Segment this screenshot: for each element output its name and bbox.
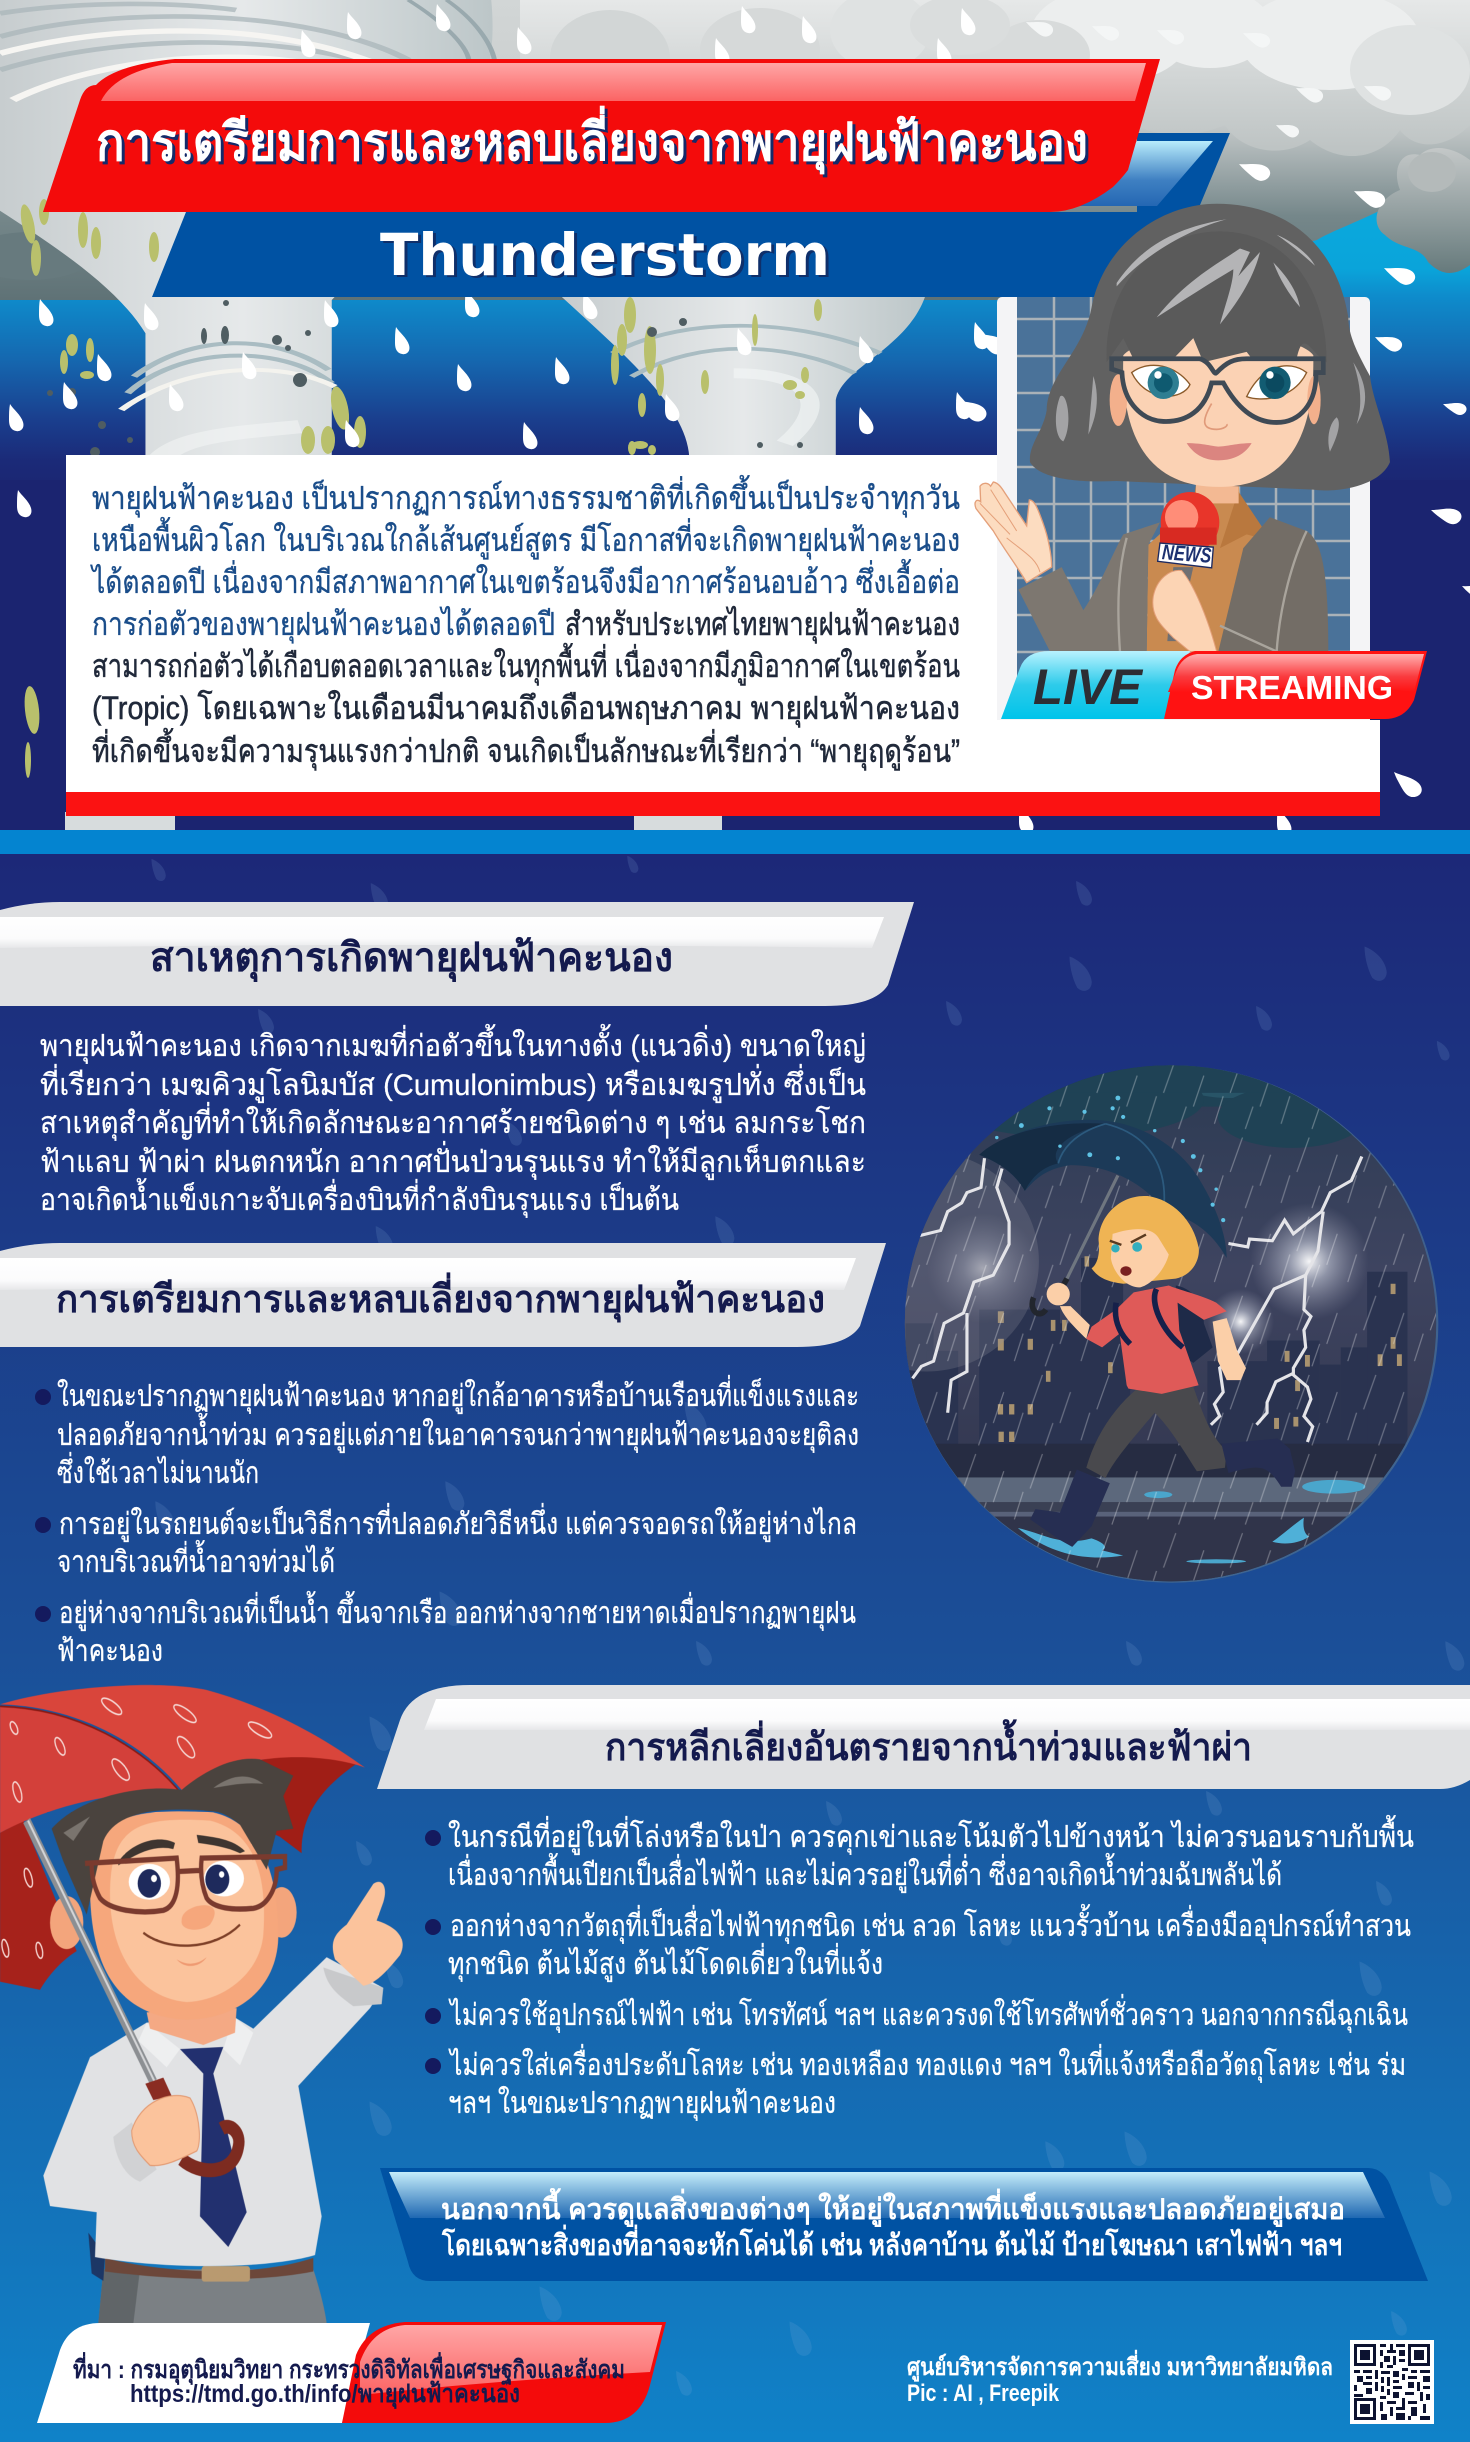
credit: source box: https://tmd.go.th/info/พายุฝนฟ้าคะนอง xyxy=(130,2380,520,2410)
background: faint rain drops xyxy=(150,854,1466,2397)
reporter face xyxy=(1123,335,1313,487)
man trousers xyxy=(98,2269,327,2323)
illustration: storm clouds xyxy=(0,0,1470,300)
background: sky xyxy=(0,200,1470,500)
runner legs and boots xyxy=(1086,1387,1227,1478)
man holding hand xyxy=(132,2096,199,2166)
credit: organisation xyxy=(907,2349,1333,2407)
credit: source box: ที่มา : กรมอุตุนิยมวิทยา กระทรวงดิจิทัลเพื่อเศรษฐกิจและสังคม xyxy=(73,2352,625,2386)
runner torso and arms xyxy=(1086,1285,1227,1394)
list: preparation bullets: ซึ่งใช้เวลาไม่นานนัก xyxy=(57,1452,259,1490)
reporter jacket xyxy=(1018,522,1160,651)
background: navy lower header xyxy=(0,480,1470,840)
icon: QR code xyxy=(1350,2340,1434,2424)
umbrella canopy xyxy=(0,1685,365,1790)
man neck xyxy=(147,2008,237,2045)
text block: intro paragraph: การก่อตัวของพายุฝนฟ้าคะนองได้ตลอดปี xyxy=(92,606,555,644)
text block: intro paragraph: สามารถก่อตัวได้เกือบตลอดเวลาและในทุกพื้นที่ เนื่องจากมีภูมิอากาศในเขตร้อน xyxy=(92,643,960,686)
list: preparation bullets: ในขณะปรากฏพายุฝนฟ้าคะนอง หากอยู่ใกล้อาคารหรือบ้านเรือนที่แข็งแรงและ xyxy=(57,1375,859,1415)
city buildings xyxy=(906,1258,1407,1482)
reporter hair xyxy=(1030,204,1390,490)
divider band xyxy=(0,830,1470,854)
subtitle: Thunderstorm: Thunderstorm xyxy=(383,223,833,291)
list: preparation bullets: อยู่ห่างจากบริเวณที่เป็นน้ำ ขึ้นจากเรือ ออกห่างจากชายหาดเมื่อปรากฏพายุฝน xyxy=(59,1591,856,1632)
reporter eyes xyxy=(1132,365,1307,399)
illustration: news reporter: NEWS xyxy=(1161,541,1212,568)
lightning bolts xyxy=(913,1156,1362,1442)
list: flood and lightning bullets: ทุกชนิด ต้นไม้สูง ต้นไม้โดดเดี่ยวในที่แจ้ง xyxy=(448,1943,883,1983)
credit: organisation: ศูนย์บริหารจัดการความเสี่ยง มหาวิทยาลัยมหิดล xyxy=(907,2349,1333,2382)
credit: source box xyxy=(37,2322,666,2423)
text block: intro paragraph: เหนือพื้นผิวโลก ในบริเวณใกล้เส้นศูนย์สูตร มีโอกาสที่จะเกิดพายุฝนฟ้าคะนอง xyxy=(92,517,960,560)
runner head xyxy=(1092,1196,1199,1284)
reporter neck and blouse xyxy=(1147,479,1270,651)
umbrella xyxy=(979,1120,1227,1258)
badge: live streaming xyxy=(1001,651,1427,719)
reporter nose and lips xyxy=(1205,404,1227,429)
night clouds xyxy=(994,1065,1352,1148)
illustration: white rain drops xyxy=(9,4,1470,835)
section heading: causes: สาเหตุการเกิดพายุฝนฟ้าคะนอง xyxy=(150,936,673,983)
illustration: flying leaves and debris xyxy=(18,199,822,778)
runner backpack xyxy=(1176,1285,1213,1363)
illustration: man with red umbrella xyxy=(0,1685,403,2323)
illustration: woman running in storm xyxy=(904,1065,1438,1583)
title text: การเตรียมการและหลบเลี่ยงจากพายุฝนฟ้าคะนอง xyxy=(96,106,1088,175)
text block: causes paragraph: สาเหตุสำคัญที่ทำให้เกิดลักษณะอากาศร้ายชนิดต่าง ๆ เช่น ลมกระโชก xyxy=(40,1102,866,1142)
text block: intro paragraph: ได้ตลอดปี เนื่องจากมีสภาพอากาศในเขตร้อนจึงมีอากาศร้อนอบอ้าว ซึ่งเอื้อต่อ xyxy=(90,559,960,600)
man eyes xyxy=(129,1864,170,1900)
list: preparation bullets: ฟ้าคะนอง xyxy=(57,1635,163,1668)
umbrella droplets xyxy=(1,1695,273,1959)
man ears and face xyxy=(50,1896,83,1949)
background: lower section xyxy=(0,854,1470,2442)
text block: causes paragraph: อาจเกิดน้ำแข็งเกาะจับเครื่องบินที่กำลังบินรุนแรง เป็นต้น xyxy=(40,1178,679,1219)
text block: intro paragraph: พายุฝนฟ้าคะนอง เป็นปรากฏการณ์ทางธรรมชาติที่เกิดขึ้นเป็นประจำทุกวัน xyxy=(92,475,960,518)
section heading: flood and lightning: การหลีกเลี่ยงอันตรายจากน้ำท่วมและฟ้าผ่า xyxy=(605,1719,1252,1769)
credit: organisation: Pic : AI , Freepik xyxy=(907,2380,1060,2407)
street xyxy=(936,1444,1406,1478)
list: flood and lightning bullets xyxy=(425,1815,1414,2122)
illustration: tornado bases below panel xyxy=(65,812,722,832)
label: STREAMING: STREAMING xyxy=(1191,669,1393,706)
text block: intro paragraph: (Tropic) โดยเฉพาะในเดือนมีนาคมถึงเดือนพฤษภาคม พายุฝนฟ้าคะนอง xyxy=(92,690,960,728)
panel: studio backdrop xyxy=(997,297,1370,737)
reporter microphone xyxy=(1161,492,1219,553)
man brows xyxy=(118,1835,245,1865)
lightning glows xyxy=(937,1224,1028,1314)
reporter raised hand xyxy=(975,482,1052,583)
callout: care for belongings: นอกจากนี้ ควรดูแลสิ่งของต่างๆ ให้อยู่ในสภาพที่แข็งแรงและปลอดภัยอยู่เสมอ xyxy=(441,2187,1345,2227)
list: preparation bullets xyxy=(35,1375,859,1668)
red base bar xyxy=(66,792,1380,816)
list: preparation bullets: การอยู่ในรถยนต์จะเป็นวิธีการที่ปลอดภัยวิธีหนึ่ง แต่ควรจอดรถให้อยู่ห่างไกล xyxy=(59,1503,857,1542)
list: preparation bullets: ปลอดภัยจากน้ำท่วม ควรอยู่แต่ภายในอาคารจนกว่าพายุฝนฟ้าคะนองจะยุติลง xyxy=(57,1413,859,1454)
man glasses xyxy=(85,1856,285,1912)
banner: blue subtitle xyxy=(152,133,1230,297)
section heading: preparation xyxy=(0,1243,886,1347)
illustration: right tornado xyxy=(561,297,925,470)
text block: causes paragraph: ที่เรียกว่า เมฆคิวมูโลนิมบัส (Cumulonimbus) หรือเมฆรูปทั่ง ซึ่งเป็น xyxy=(40,1064,866,1103)
reporter glasses xyxy=(1112,359,1323,422)
panel: white intro card xyxy=(66,455,1380,816)
man shirt xyxy=(43,1957,383,2266)
man hair xyxy=(52,1759,293,1914)
section heading: preparation: การเตรียมการและหลบเลี่ยงจากพายุฝนฟ้าคะนอง xyxy=(56,1272,825,1323)
umbrella underside xyxy=(0,1821,77,1990)
umbrella pole xyxy=(27,1821,153,2082)
text block: intro paragraph: สำหรับประเทศไทยพายุฝนฟ้าคะนอง xyxy=(565,606,960,644)
illustration: left tornado xyxy=(0,0,494,470)
section heading: causes xyxy=(0,902,914,1006)
illustration: news reporter xyxy=(975,204,1390,651)
text block: causes paragraph: พายุฝนฟ้าคะนอง เกิดจากเมฆที่ก่อตัวขึ้นในทางตั้ง (แนวดิ่ง) ขนาดใหญ่ xyxy=(40,1024,866,1065)
callout: care for belongings xyxy=(380,2168,1428,2281)
rain streaks xyxy=(895,1055,1446,1595)
man tie xyxy=(180,2047,247,2247)
text block: causes paragraph: ฟ้าแลบ ฟ้าผ่า ฝนตกหนัก อากาศปั่นป่วนรุนแรง ทำให้มีลูกเห็บตกและ xyxy=(40,1141,866,1181)
banner: red title xyxy=(43,59,1160,212)
list: flood and lightning bullets: ฯลฯ ในขณะปรากฏพายุฝนฟ้าคะนอง xyxy=(448,2086,836,2122)
text block: intro paragraph xyxy=(90,475,960,771)
man nose and mouth xyxy=(182,1905,215,1930)
pouch and belt xyxy=(88,2233,105,2281)
reporter holding hand xyxy=(1153,570,1217,651)
pointing hand xyxy=(333,1882,403,1986)
title text: การเตรียมการและหลบเลี่ยงจากพายุฝนฟ้าคะนอง xyxy=(99,109,1091,178)
list: flood and lightning bullets: เนื่องจากพื้นเปียกเป็นสื่อไฟฟ้า และไม่ควรอยู่ในที่ต่ำ ซึ่งอาจเกิดน้ำท่วมฉับพลันได้ xyxy=(448,1853,1282,1893)
text block: intro paragraph: ที่เกิดขึ้นจะมีความรุนแรงกว่าปกติ จนเกิดเป็นลักษณะที่เรียกว่า “พายุฤดูร้อน” xyxy=(92,728,960,771)
list: preparation bullets: จากบริเวณที่น้ำอาจท่วมได้ xyxy=(57,1540,335,1579)
subtitle: Thunderstorm: Thunderstorm xyxy=(380,221,830,289)
label: LIVE: LIVE xyxy=(1033,659,1144,715)
text block: causes paragraph xyxy=(40,1024,866,1219)
reporter fringe xyxy=(1107,231,1327,362)
section heading: flood and lightning xyxy=(377,1685,1470,1789)
